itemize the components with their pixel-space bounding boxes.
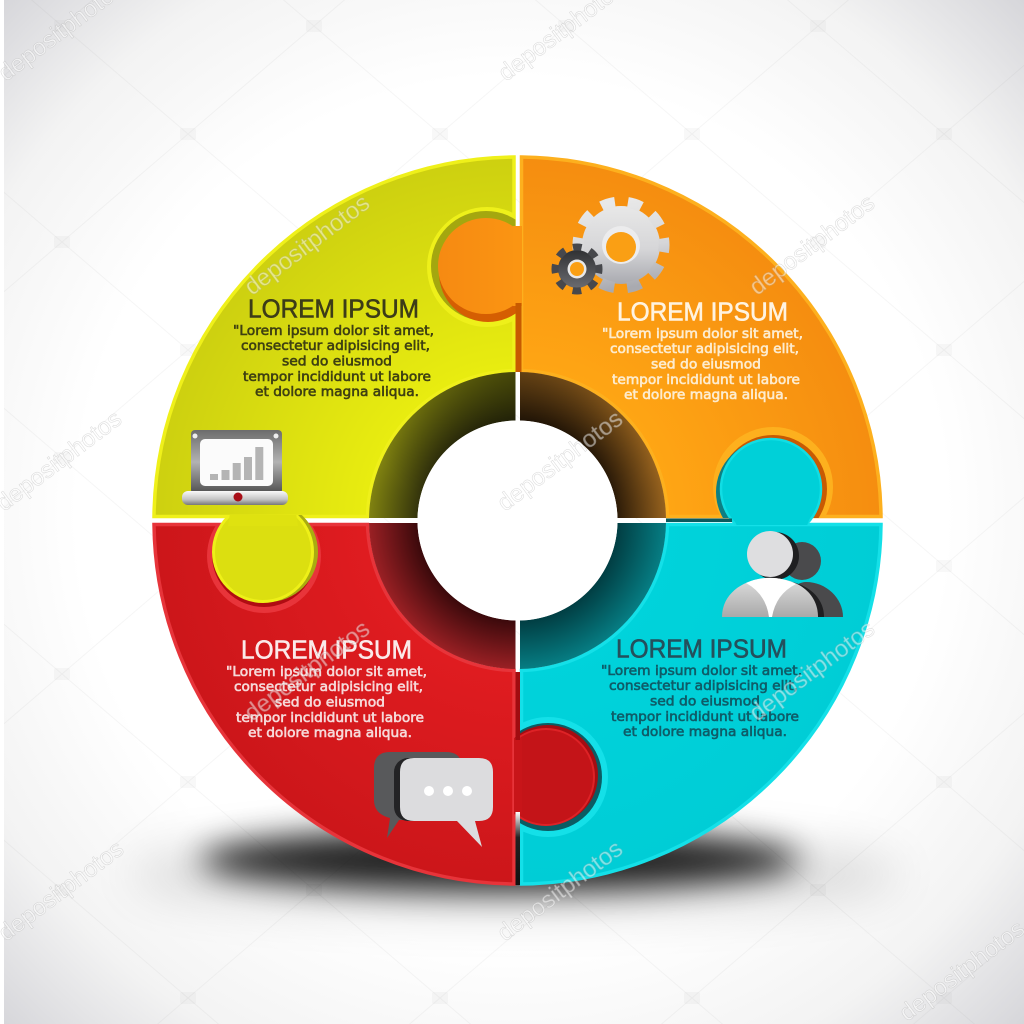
puzzle tab: red: [514, 672, 598, 885]
text block: teal: et dolore magna aliqua.: [623, 725, 787, 740]
text block: teal: [601, 634, 802, 740]
text block: orange: LOREM IPSUM: [617, 296, 788, 326]
watermarks: depositphotos: [239, 189, 375, 301]
text block: yellow: LOREM IPSUM: [248, 294, 419, 324]
yellow ring segment: [369, 372, 516, 518]
watermarks: depositphotos: [744, 189, 880, 301]
watermarks: depositphotos: [744, 615, 880, 727]
notch for red tab: [520, 717, 608, 837]
puzzle tab: teal: [721, 439, 821, 539]
panel: red puzzle quadrant: [154, 499, 516, 884]
text block: yellow: consectetur adipisicing elit,: [241, 339, 430, 354]
notch for orange tab: [427, 207, 516, 327]
text block: yellow: "Lorem ipsum dolor sit amet,: [233, 324, 434, 339]
teal tab shadow strip: [666, 518, 732, 522]
icon: gears: [551, 196, 670, 295]
puzzle tab: orange: [438, 218, 522, 372]
notch for yellow tab: [207, 526, 321, 613]
icon: laptop with bar chart: [182, 430, 288, 505]
centre white circle: [418, 420, 618, 620]
notch for teal tab: [713, 427, 833, 518]
ground shadow: [130, 829, 900, 914]
text block: red: [226, 634, 427, 741]
watermarks: depositphotos: [492, 835, 628, 947]
icon: people: [722, 531, 843, 617]
text block: teal: LOREM IPSUM: [616, 634, 787, 664]
text block: yellow: et dolore magna aliqua.: [255, 385, 419, 400]
text block: orange: [602, 296, 803, 403]
panel: orange puzzle quadrant: [520, 157, 881, 547]
panel: teal puzzle quadrant: [488, 523, 881, 884]
text block: yellow: [233, 294, 434, 400]
text block: yellow: tempor incididunt ut labore: [243, 370, 431, 385]
puzzle tab: yellow: [212, 515, 318, 603]
text block: yellow: sed do eiusmod: [282, 354, 392, 370]
text block: red: sed do eiusmod: [275, 696, 385, 710]
orange ring segment: [520, 372, 666, 518]
text block: teal: sed do eiusmod: [650, 694, 760, 710]
teal ring segment: [520, 523, 666, 669]
text block: teal: tempor incididunt ut labore: [611, 710, 799, 725]
text block: orange: "Lorem ipsum dolor sit amet,: [602, 327, 803, 342]
icon: speech bubbles: [374, 752, 493, 847]
watermarks: depositphotos: [492, 405, 628, 517]
red ring segment: [369, 523, 516, 669]
text block: red: "Lorem ipsum dolor sit amet,: [226, 665, 427, 680]
text block: orange: consectetur adipisicing elit,: [610, 342, 799, 357]
text block: teal: consectetur adipisicing elit,: [609, 679, 798, 694]
text block: red: et dolore magna aliqua.: [248, 726, 412, 741]
text block: orange: et dolore magna aliqua.: [624, 388, 788, 403]
text block: red: tempor incididunt ut labore: [236, 711, 424, 726]
text block: red: consectetur adipisicing elit,: [234, 680, 423, 695]
panel: yellow puzzle quadrant: [154, 157, 547, 518]
watermarks: depositphotos: [239, 615, 375, 727]
text block: teal: "Lorem ipsum dolor sit amet,: [601, 664, 802, 679]
text block: orange: tempor incididunt ut labore: [612, 373, 800, 388]
text block: red: LOREM IPSUM: [241, 634, 412, 664]
text block: orange: sed do eiusmod: [651, 358, 761, 372]
